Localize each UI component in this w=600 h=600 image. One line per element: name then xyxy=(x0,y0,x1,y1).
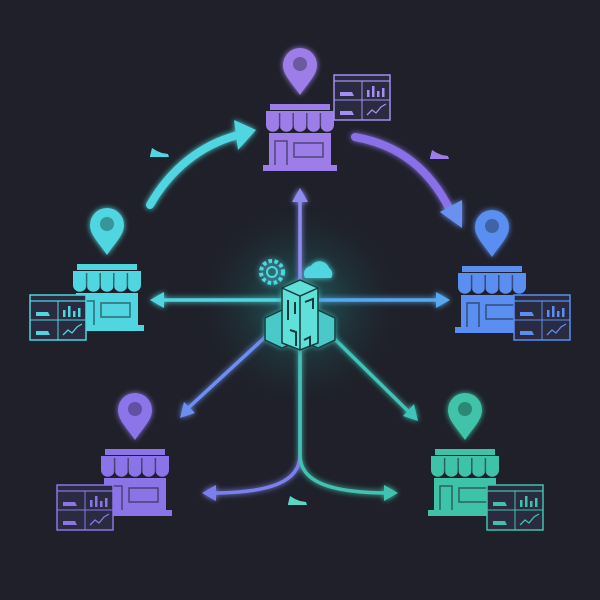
dashboard: right xyxy=(514,295,570,340)
store: right xyxy=(455,210,529,333)
store: left xyxy=(70,208,144,331)
dashboard: bottom-right xyxy=(487,485,543,530)
store: top xyxy=(263,48,337,171)
dashboard: top xyxy=(334,75,390,120)
arrows: hub connections xyxy=(150,135,450,493)
hub icon: warehouse with gear and cloud xyxy=(261,261,335,350)
dashboard: left xyxy=(30,295,86,340)
arrowheads xyxy=(150,120,462,501)
store: bottom-left xyxy=(98,393,172,516)
background glow xyxy=(190,195,410,415)
shoe icons xyxy=(150,148,449,505)
store: bottom-right xyxy=(428,393,502,516)
dashboard: bottom-left xyxy=(57,485,113,530)
